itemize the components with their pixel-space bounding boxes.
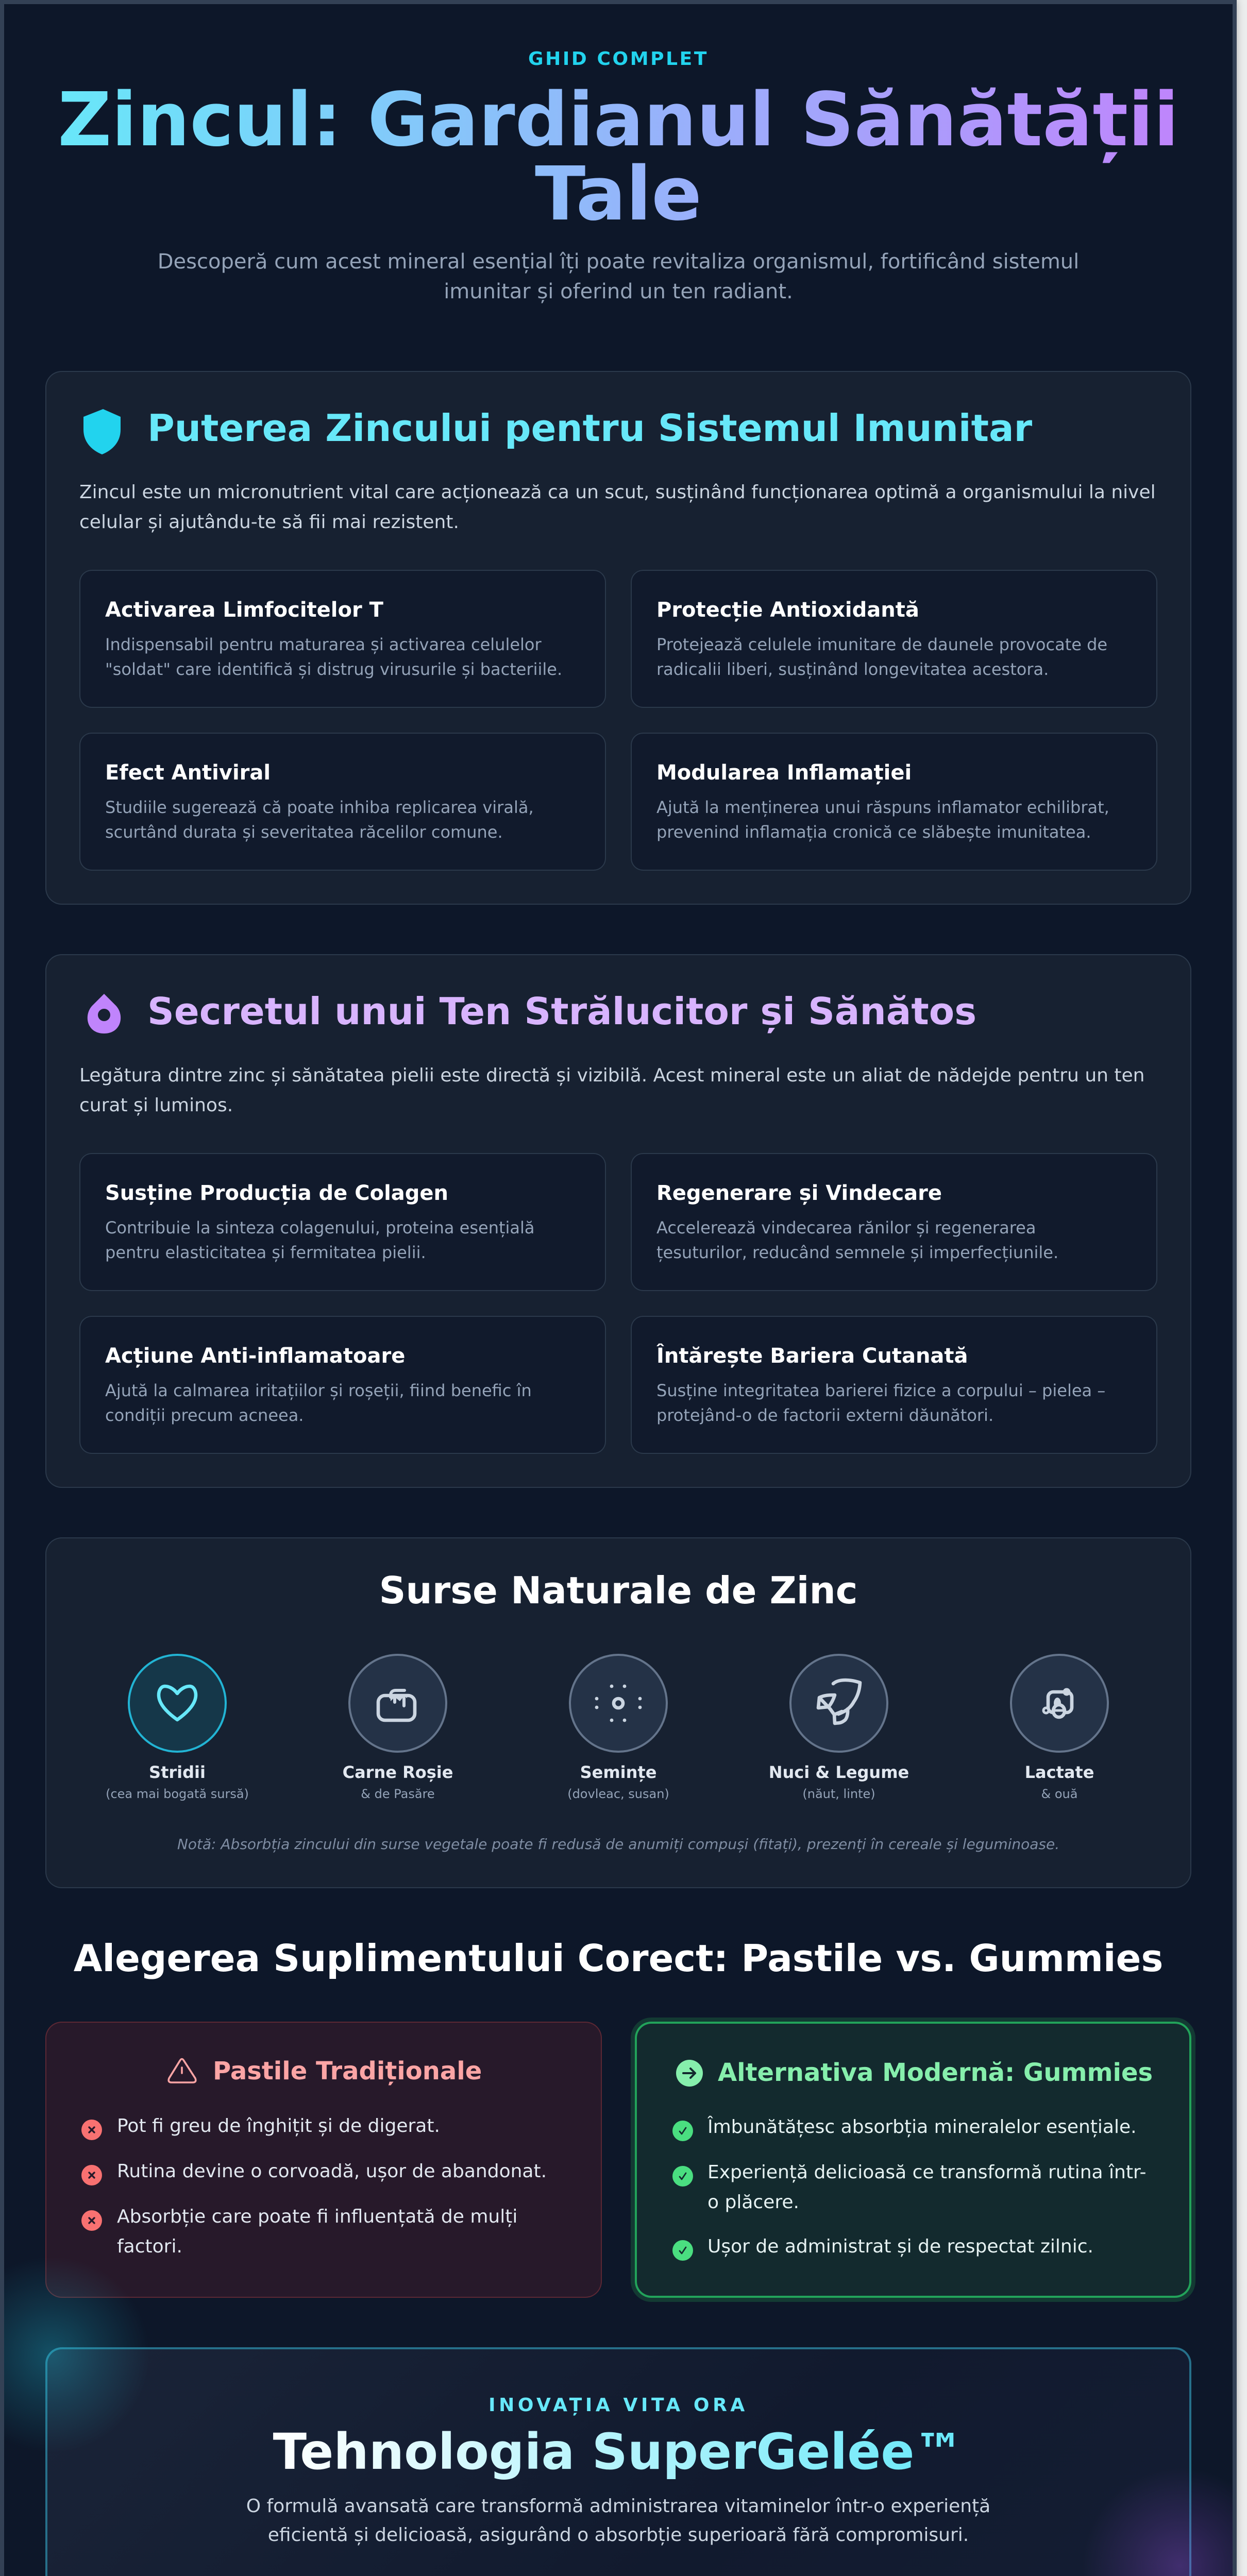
item text xyxy=(707,2158,1146,2217)
card: inflammation modulation: prevenind inflamația cronică ce slăbește imunitatea. xyxy=(656,822,1091,842)
card: inflammation modulation xyxy=(631,733,1157,871)
icon: warning triangle xyxy=(167,2058,197,2083)
label: red meat: Carne Roșie xyxy=(343,1762,453,1782)
icon: drop xyxy=(88,994,121,1033)
item text: o plăcere. xyxy=(707,2192,799,2213)
card: T lymphocytes: Indispensabil pentru maturarea și activarea celulelor xyxy=(105,635,542,654)
intro text xyxy=(79,1065,1144,1116)
icon: seeds xyxy=(569,1654,668,1753)
panel: SuperGelée technology xyxy=(45,2347,1191,2576)
card: antioxidant protection: Protejează celulele imunitare de daunele provocate de xyxy=(656,635,1107,654)
panel: radiant skin xyxy=(45,954,1191,1488)
icon: cross xyxy=(81,2120,102,2140)
intro text: curat și luminos. xyxy=(79,1095,233,1116)
heading: immune system: Puterea Zincului pentru Sistemul Imunitar xyxy=(147,406,1032,450)
list item xyxy=(81,2206,517,2257)
source: red meat xyxy=(343,1654,453,1801)
card: regeneration xyxy=(631,1153,1157,1291)
note: poultry: & de Pasăre xyxy=(361,1787,435,1801)
intro text: Zincul este un micronutrient vital care acționează ca un scut, susținând funcționarea optimă a organismului la nivel xyxy=(79,482,1156,503)
heading: natural sources: Surse Naturale de Zinc xyxy=(379,1569,857,1612)
label: seeds: Semințe xyxy=(580,1762,656,1782)
item text: Ușor de administrat și de respectat zilnic. xyxy=(707,2236,1093,2257)
card: antiviral effect: Efect Antiviral xyxy=(105,761,271,785)
card: antioxidant protection: radicalii liberi, susținând longevitatea acestora. xyxy=(656,659,1049,679)
eyebrow: Vita Ora innovation: INOVAȚIA VITA ORA xyxy=(488,2395,748,2416)
glow: cyan xyxy=(0,2251,155,2458)
title: SuperGelée: Tehnologia SuperGelée™ xyxy=(273,2423,964,2481)
icon: check xyxy=(672,2240,693,2261)
note on absorption: Notă: Absorbția zincului din surse vegetale poate fi redusă de anumiți compuși (fitați), prezenți în cereale și leguminoase. xyxy=(177,1836,1059,1853)
description xyxy=(45,2492,1191,2550)
note: legumes: (năut, linte) xyxy=(802,1787,875,1801)
note: oysters: (cea mai bogată sursă) xyxy=(106,1787,249,1801)
source: seeds xyxy=(567,1654,669,1801)
card: skin barrier: Întărește Bariera Cutanată xyxy=(656,1344,968,1368)
label: dairy: Lactate xyxy=(1025,1762,1094,1782)
source: oysters xyxy=(106,1654,249,1801)
source: nuts and legumes xyxy=(769,1654,909,1801)
list item xyxy=(672,2112,1162,2142)
panel: immune system xyxy=(45,371,1191,905)
icon: heart xyxy=(128,1654,227,1753)
subtitle: imunitar și oferind un ten radiant. xyxy=(444,280,793,303)
panel: gummies xyxy=(635,2022,1191,2298)
list item xyxy=(672,2158,1162,2217)
panel: traditional pills xyxy=(45,2022,602,2298)
description: O formulă avansată care transformă administrarea vitaminelor într-o experiență xyxy=(246,2496,990,2517)
heading: comparison: Alegerea Suplimentului Corect: Pastile vs. Gummies xyxy=(74,1937,1163,1980)
card: antiviral effect xyxy=(79,733,606,871)
icon: check xyxy=(672,2121,693,2141)
card: regeneration: Regenerare și Vindecare xyxy=(656,1181,942,1205)
label: oysters: Stridii xyxy=(149,1762,206,1782)
icon: cross xyxy=(81,2210,102,2231)
card: antiviral effect: Studiile sugerează că poate inhiba replicarea virală, xyxy=(105,798,534,817)
source: dairy xyxy=(1010,1654,1109,1801)
list item xyxy=(81,2115,440,2140)
item text: factori. xyxy=(117,2236,182,2257)
card: antioxidant protection: Protecție Antioxidantă xyxy=(656,598,919,622)
item text xyxy=(117,2202,517,2261)
card: antioxidant protection xyxy=(631,570,1157,708)
subtitle xyxy=(158,250,1079,303)
icon: nut xyxy=(789,1654,888,1753)
card: regeneration: Accelerează vindecarea rănilor și regenerarea xyxy=(656,1218,1036,1238)
card: inflammation modulation: Modularea Inflamației xyxy=(656,761,912,785)
description: eficientă și delicioasă, asigurând o absorbție superioară fără compromisuri. xyxy=(268,2524,969,2546)
main title: Zincul: Gardianul Sănătății xyxy=(58,76,1179,163)
card: anti-inflammatory xyxy=(79,1316,606,1454)
glow: purple xyxy=(1077,2463,1237,2576)
panel: natural sources xyxy=(45,1537,1191,1888)
icon: shield xyxy=(83,409,121,454)
intro text xyxy=(79,482,1156,533)
note: eggs: & ouă xyxy=(1041,1787,1077,1801)
card: skin barrier: protejând-o de factorii externi dăunători. xyxy=(656,1405,993,1425)
icon: arrow circle xyxy=(676,2060,703,2087)
main title xyxy=(45,82,1191,247)
main title: Tale xyxy=(535,150,702,237)
card: anti-inflammatory: Ajută la calmarea iritațiilor și roșeții, fiind benefic în xyxy=(105,1381,532,1400)
note: seeds: (dovleac, susan) xyxy=(567,1787,669,1801)
card: collagen: pentru elasticitatea și fermitatea pielii. xyxy=(105,1243,426,1262)
item text: Absorbție care poate fi influențată de mulți xyxy=(117,2206,517,2227)
card: antiviral effect: scurtând durata și severitatea răcelilor comune. xyxy=(105,822,503,842)
item text: Pot fi greu de înghițit și de digerat. xyxy=(117,2115,440,2137)
icon: check xyxy=(672,2166,693,2187)
card: skin barrier xyxy=(631,1316,1157,1454)
card: skin barrier: Susține integritatea barierei fizice a corpului – pielea – xyxy=(656,1381,1105,1400)
label: nuts and legumes: Nuci & Legume xyxy=(769,1762,909,1782)
card: collagen xyxy=(79,1153,606,1291)
intro text: celular și ajutându-te să fii mai rezistent. xyxy=(79,512,459,533)
card: regeneration: țesuturilor, reducând semnele și imperfecțiunile. xyxy=(656,1243,1058,1262)
intro text: Legătura dintre zinc și sănătatea pielii este directă și vizibilă. Acest mineral este un aliat de nădejde pentru un ten xyxy=(79,1065,1144,1086)
item text: Rutina devine o corvoadă, ușor de abandonat. xyxy=(117,2161,547,2182)
icon: meat xyxy=(348,1654,447,1753)
heading: traditional pills: Pastile Tradiționale xyxy=(213,2057,482,2086)
header eyebrow: GHID COMPLET: GHID COMPLET xyxy=(528,48,709,70)
item text: Experiență delicioasă ce transformă rutina într- xyxy=(707,2162,1146,2183)
heading: radiant skin: Secretul unui Ten Strălucitor și Sănătos xyxy=(147,990,976,1033)
card: T lymphocytes: Activarea Limfocitelor T xyxy=(105,598,383,622)
card: collagen: Contribuie la sinteza colagenului, proteina esențială xyxy=(105,1218,535,1238)
card: anti-inflammatory: Acțiune Anti-inflamatoare xyxy=(105,1344,405,1368)
icon: cross xyxy=(81,2165,102,2185)
item text: Îmbunătățesc absorbția mineralelor esențiale. xyxy=(707,2116,1137,2138)
card: anti-inflammatory: condiții precum acneea. xyxy=(105,1405,304,1425)
card: inflammation modulation: Ajută la menținerea unui răspuns inflamator echilibrat, xyxy=(656,798,1109,817)
card: T lymphocytes xyxy=(79,570,606,708)
list item xyxy=(672,2232,1162,2262)
icon: dairy xyxy=(1010,1654,1109,1753)
card: collagen: Susține Producția de Colagen xyxy=(105,1181,448,1205)
card: T lymphocytes: "soldat" care identifică și distrug virusurile și bacteriile. xyxy=(105,659,562,679)
list item xyxy=(81,2161,547,2185)
subtitle: Descoperă cum acest mineral esențial îți poate revitaliza organismul, fortificând sistemul xyxy=(158,250,1079,274)
heading: gummies: Alternativa Modernă: Gummies xyxy=(718,2058,1153,2087)
